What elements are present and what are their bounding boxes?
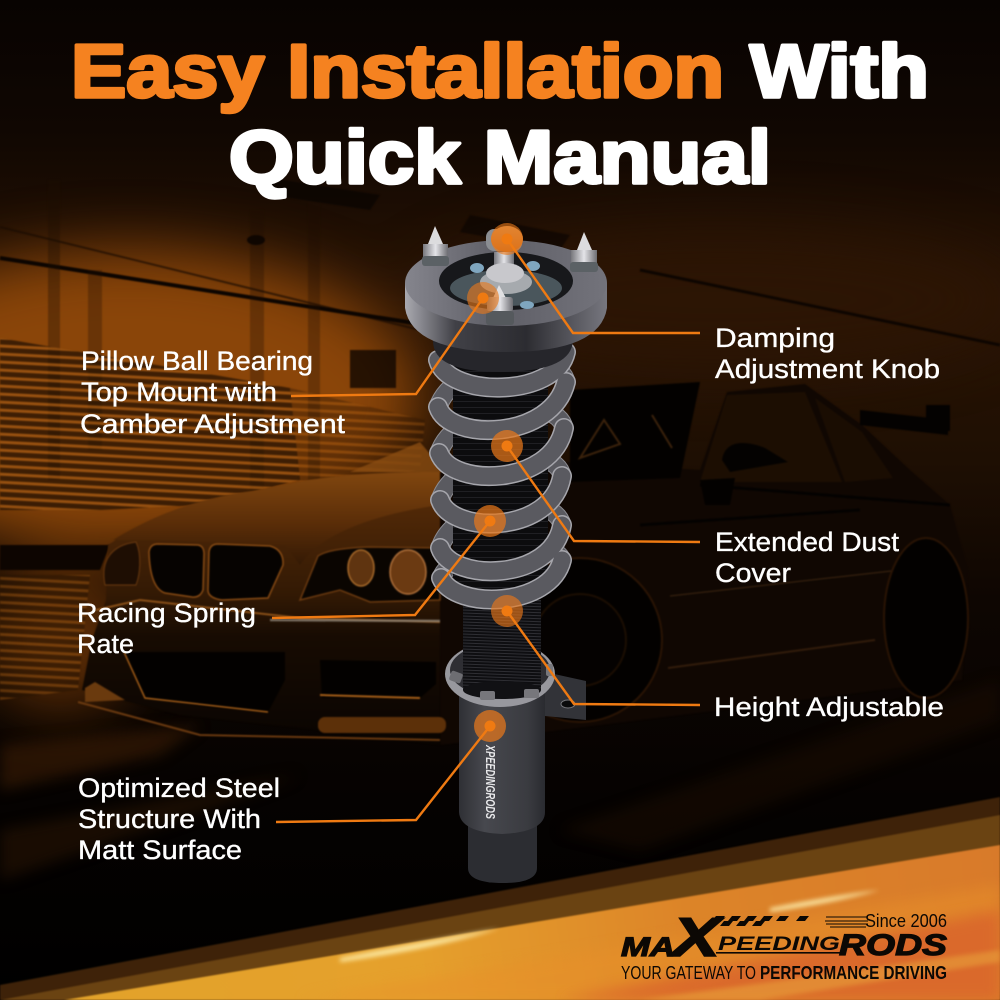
callout: damping adjustment knob: Damping — [715, 323, 835, 353]
callout: height adjustable — [491, 595, 944, 722]
brand logo — [621, 906, 947, 983]
callout: optimized steel structure: Optimized Steel — [78, 773, 280, 803]
spring rear arcs — [438, 362, 566, 578]
title — [71, 29, 929, 199]
damping knob — [486, 226, 523, 252]
callout: pillow ball bearing top mount: Camber Adjustment — [80, 409, 346, 439]
callout: optimized steel structure: Structure With — [78, 804, 261, 834]
wordmark X: X — [668, 906, 724, 968]
mounting studs — [422, 226, 598, 325]
body logo text: XPEEDINGRODS — [483, 744, 498, 819]
tagline bold: PERFORMANCE DRIVING — [760, 963, 947, 983]
title line 2: Quick Manual — [229, 115, 771, 199]
wordmark rods: RODS — [839, 929, 947, 962]
callout: damping adjustment knob: Adjustment Knob — [715, 354, 940, 384]
background car: front fascia — [78, 442, 446, 745]
callout: racing spring rate — [77, 505, 506, 659]
wordmark peeding: PEEDING — [718, 934, 840, 955]
callout: pillow ball bearing top mount — [80, 282, 499, 439]
callout: extended dust cover: Cover — [715, 558, 791, 588]
callout: pillow ball bearing top mount: Top Mount with — [81, 377, 277, 407]
callout: height adjustable: Height Adjustable — [714, 692, 944, 722]
background car: side body — [437, 382, 968, 745]
callout: extended dust cover: Extended Dust — [715, 527, 900, 557]
bottom orange swoosh — [0, 797, 1000, 1000]
dust cover — [453, 345, 548, 590]
speed lines — [825, 917, 868, 927]
top mount plate — [405, 240, 607, 372]
callout: racing spring rate: Racing Spring — [77, 598, 256, 628]
callout: racing spring rate: Rate — [77, 629, 134, 659]
title line 1: Easy Installation — [71, 29, 724, 113]
coil spring — [438, 352, 566, 599]
lower steel body — [459, 672, 586, 883]
callout: optimized steel structure — [78, 710, 506, 865]
wordmark ma: MA — [621, 932, 675, 962]
checker flag marks — [712, 916, 809, 926]
title line 1 white word: With — [750, 29, 929, 113]
callout: damping adjustment knob — [491, 223, 940, 384]
coilover shock absorber — [405, 226, 607, 883]
tagline regular: YOUR GATEWAY TO — [621, 963, 756, 983]
threaded sleeve and spring perch — [445, 600, 555, 707]
callout: extended dust cover — [491, 430, 900, 588]
since 2006: Since 2006 — [865, 911, 947, 931]
callout: optimized steel structure: Matt Surface — [78, 835, 242, 865]
callout: pillow ball bearing top mount: Pillow Ball Bearing — [81, 346, 313, 376]
